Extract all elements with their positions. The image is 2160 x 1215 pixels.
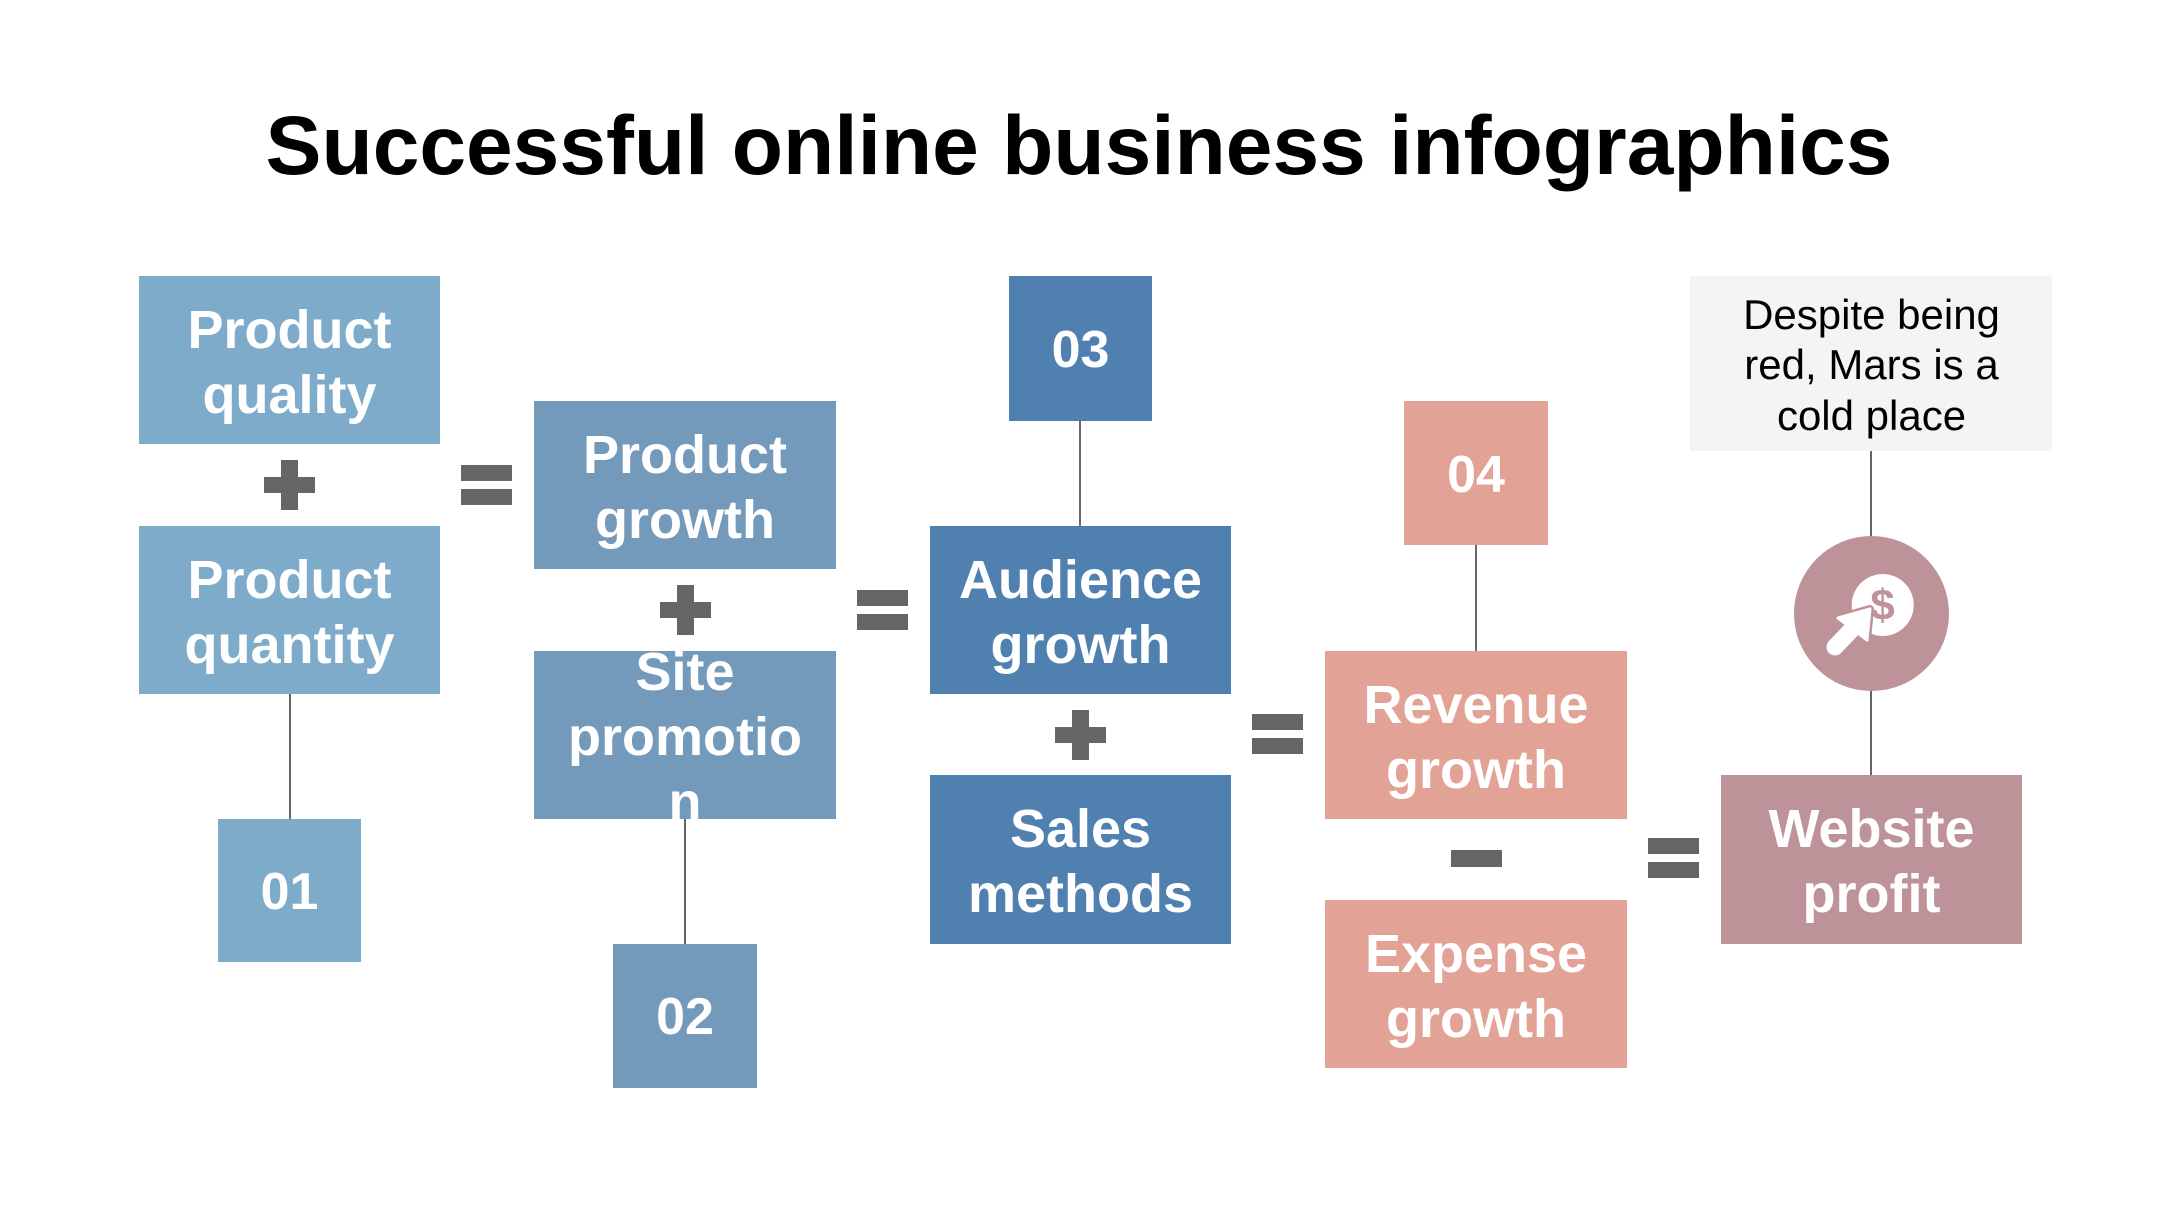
box: product growth — [534, 401, 836, 569]
box: website profit: profit — [1803, 864, 1940, 924]
minus sign — [1451, 850, 1502, 867]
number 01 — [218, 819, 361, 962]
box: site promotion: Site — [635, 642, 735, 702]
box: sales methods — [930, 775, 1231, 944]
number 04: 04 — [1447, 446, 1505, 504]
box: website profit: Website — [1768, 799, 1975, 859]
box: product quality: Product — [187, 300, 392, 360]
box: product growth: Product — [583, 424, 787, 484]
icon: money arrow in circle — [1794, 536, 1949, 691]
number 03 — [1009, 276, 1152, 421]
callout text — [1690, 276, 2052, 451]
box: expense growth: growth — [1386, 988, 1566, 1048]
box: website profit — [1721, 775, 2022, 944]
connector 04 — [1475, 545, 1477, 651]
box: sales methods: Sales — [1010, 799, 1151, 859]
connector 03 — [1079, 420, 1081, 526]
title: Successful online business infographics — [266, 98, 1892, 192]
callout text: red, Mars is a — [1744, 341, 1999, 388]
equals sign 3 — [1252, 714, 1303, 754]
box: site promotion: promotio — [568, 707, 802, 767]
connector callout to icon — [1870, 451, 1872, 537]
box: product quantity: Product — [187, 550, 392, 610]
connector icon to profit — [1870, 691, 1872, 776]
box: revenue growth: growth — [1386, 740, 1566, 800]
box: product quantity — [139, 526, 440, 694]
equals sign 2 — [857, 590, 908, 630]
box: audience growth: growth — [991, 614, 1170, 674]
box: revenue growth — [1325, 651, 1627, 819]
box: site promotion — [534, 651, 836, 819]
box: sales methods: methods — [968, 864, 1193, 924]
box: audience growth: Audience — [959, 550, 1202, 610]
box: expense growth — [1325, 900, 1627, 1068]
icon: money arrow in circle: $ — [1870, 581, 1895, 630]
connector 01 — [289, 694, 291, 820]
callout text: cold place — [1777, 392, 1966, 439]
number 04 — [1404, 401, 1548, 545]
plus sign 3 — [1055, 710, 1106, 760]
box: product quantity: quantity — [184, 614, 394, 674]
plus sign 1 — [264, 460, 315, 510]
box: audience growth — [930, 526, 1231, 694]
box: expense growth: Expense — [1365, 924, 1587, 984]
number 03: 03 — [1052, 321, 1109, 379]
equals sign 4 — [1648, 838, 1699, 878]
connector 02 — [684, 819, 686, 945]
callout text: Despite being — [1743, 291, 2000, 338]
box: product growth: growth — [595, 490, 775, 550]
number 02: 02 — [656, 988, 714, 1046]
box: product quality: quality — [202, 364, 376, 424]
equals sign 1 — [461, 465, 512, 505]
box: site promotion: n — [668, 772, 702, 832]
box: product quality — [139, 276, 440, 444]
plus sign 2 — [660, 585, 711, 635]
number 01: 01 — [261, 862, 318, 920]
number 02 — [613, 944, 757, 1088]
box: revenue growth: Revenue — [1363, 674, 1589, 734]
